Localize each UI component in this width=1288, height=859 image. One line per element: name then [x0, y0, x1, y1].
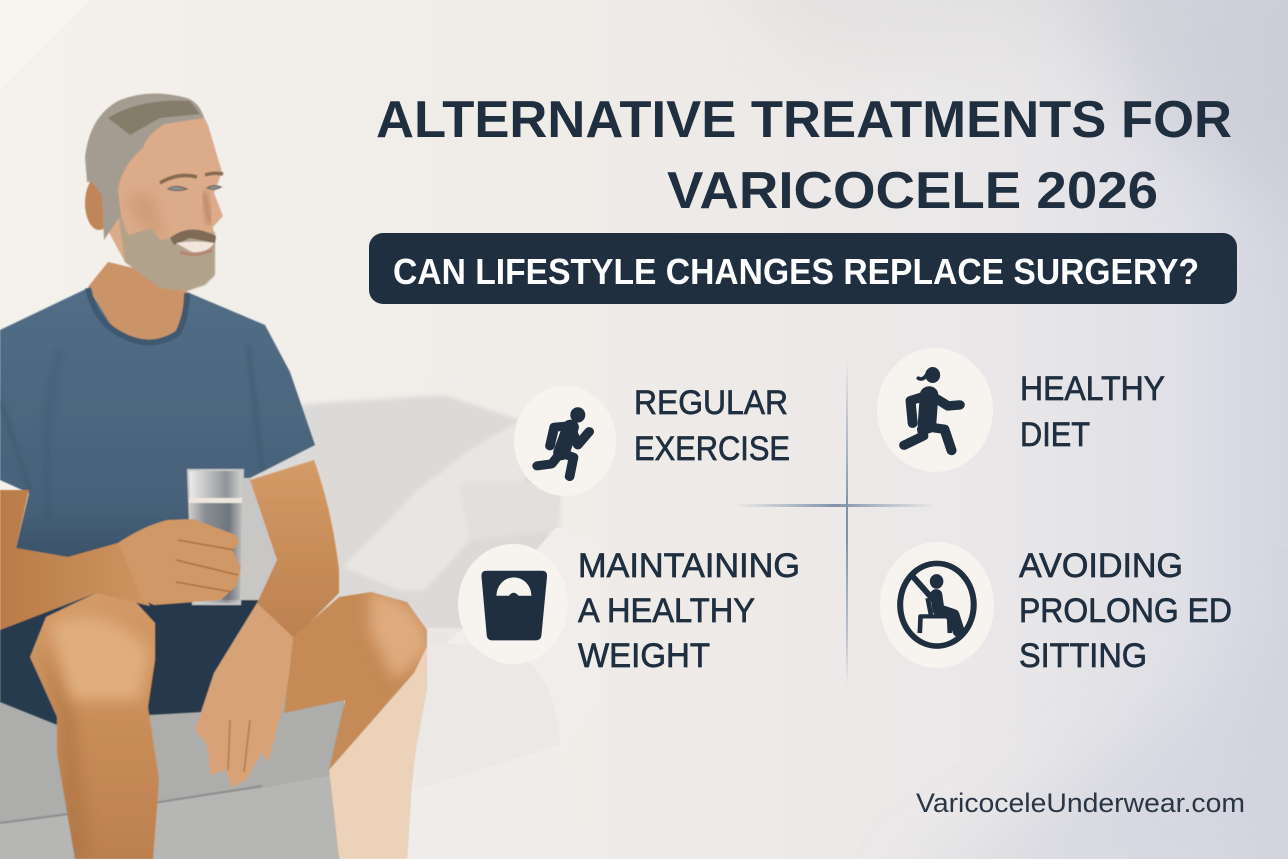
hand on knee: [195, 603, 293, 788]
item: regular exercise: [514, 384, 790, 496]
background sofa: [235, 395, 600, 859]
glass: [188, 470, 243, 604]
sleeve shading: [0, 345, 262, 520]
item: maintaining a healthy weight: [458, 544, 800, 675]
label: [1020, 370, 1165, 454]
light leg overlay: [329, 640, 430, 859]
label: SITTING: [1019, 637, 1147, 675]
icon: no sitting: [880, 542, 994, 668]
label: AVOIDING: [1019, 547, 1183, 585]
mouth: [176, 242, 214, 252]
label: REGULAR: [634, 384, 788, 422]
icon: walking figure: [877, 348, 993, 472]
label: DIET: [1020, 416, 1090, 454]
nose shadow: [204, 192, 210, 224]
label: [578, 547, 800, 675]
title: ALTERNATIVE TREATMENTS FOR: [376, 91, 1232, 149]
man: [0, 93, 435, 859]
title: [376, 91, 1232, 220]
shorts center: [130, 600, 262, 716]
divider lines: [846, 360, 848, 685]
title: VARICOCELE 2026: [667, 162, 1158, 220]
label: HEALTHY: [1020, 370, 1165, 408]
label: A HEALTHY: [578, 592, 755, 630]
eyes: [168, 186, 221, 190]
head: [85, 93, 223, 291]
neck: [88, 262, 187, 345]
lower lip: [180, 250, 212, 255]
item: healthy diet: [877, 348, 1165, 472]
left arm: [0, 490, 150, 630]
subtitle banner: [369, 233, 1237, 304]
label: WEIGHT: [578, 637, 710, 675]
right forearm: [250, 460, 339, 640]
item: avoiding prolonged sitting: [880, 542, 1232, 675]
backdrop gap between glass and arm: [240, 478, 277, 615]
label: MAINTAINING: [578, 547, 800, 585]
label: [1019, 547, 1232, 675]
label: PROLONG ED: [1019, 592, 1232, 630]
shirt: [0, 288, 315, 618]
icon: runner: [514, 386, 616, 496]
hair: [85, 93, 204, 240]
seat cushion under man: [0, 680, 345, 859]
hand on glass: [118, 519, 241, 605]
face: [105, 115, 223, 291]
collar: [88, 288, 187, 342]
ear: [85, 176, 113, 230]
right leg: [280, 585, 435, 859]
label: [634, 384, 790, 468]
left leg: [25, 590, 165, 859]
website footer: VaricoceleUnderwear.com: [916, 788, 1245, 818]
subtitle banner: CAN LIFESTYLE CHANGES REPLACE SURGERY?: [393, 251, 1199, 292]
label: EXERCISE: [634, 430, 790, 468]
beard: [117, 205, 215, 291]
mustache: [170, 229, 216, 245]
brows: [160, 173, 223, 183]
shorts left: [0, 600, 70, 730]
icon: scale: [458, 544, 568, 664]
